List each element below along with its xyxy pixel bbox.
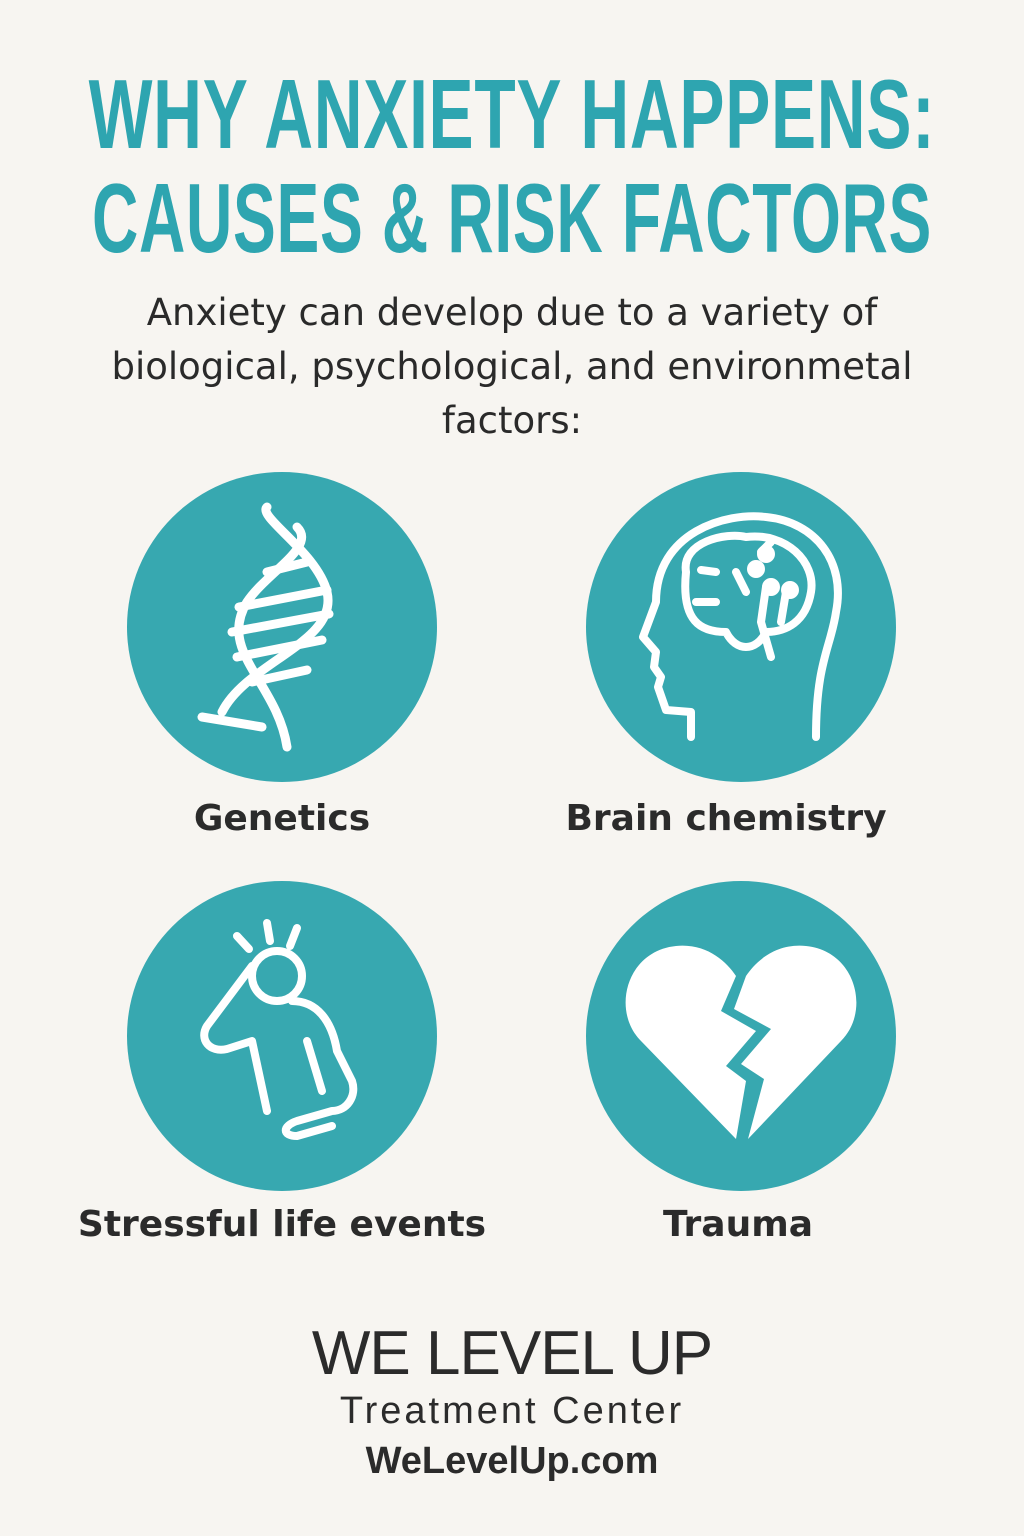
- icon: stressful life events person: [127, 881, 437, 1191]
- intro text: biological, psychological, and environmetal: [111, 345, 912, 388]
- website: WeLevelUp.com: [366, 1440, 658, 1482]
- label: Genetics: Genetics: [194, 798, 370, 839]
- label: Brain chemistry: Brain chemistry: [565, 798, 887, 839]
- icon: trauma broken heart: [586, 881, 896, 1191]
- icon: genetics DNA: [127, 472, 437, 782]
- label: Stressful life events: Stressful life events: [78, 1204, 486, 1245]
- icon: brain chemistry head: [586, 472, 896, 782]
- intro text: [111, 291, 912, 442]
- title line 1: WHY ANXIETY HAPPENS:: [89, 59, 935, 169]
- title line 2: CAUSES & RISK FACTORS: [92, 163, 932, 273]
- logo: We Level Up: WE LEVEL UP: [312, 1319, 712, 1388]
- label: Trauma: Trauma: [663, 1204, 813, 1245]
- intro text: factors:: [442, 399, 582, 442]
- intro text: Anxiety can develop due to a variety of: [147, 291, 877, 334]
- logo subtitle: Treatment Center: [340, 1390, 684, 1432]
